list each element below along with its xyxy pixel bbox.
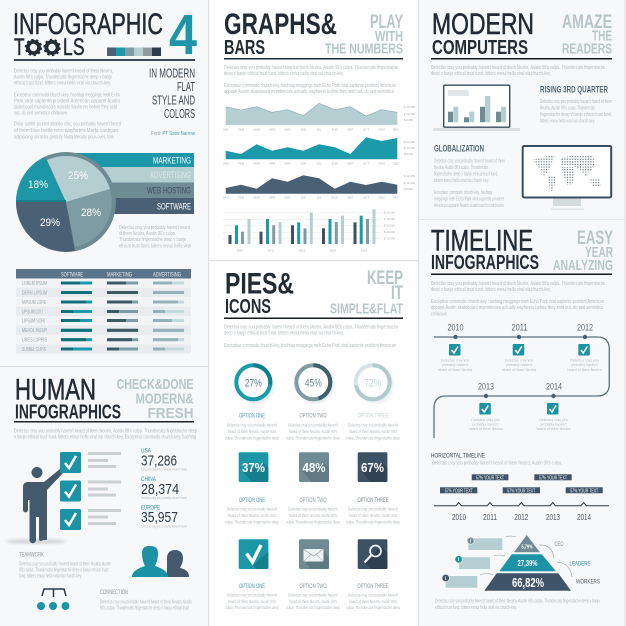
area chart: light: APR bbox=[269, 128, 276, 132]
comparison table: MARKETING bbox=[107, 272, 132, 278]
title: pies and icons: ICONS bbox=[225, 296, 271, 318]
number 4: 4 bbox=[169, 3, 197, 67]
side heading: IN MODERN bbox=[149, 66, 195, 80]
tile captions: culpa. Thundercats fingerstache deep bbox=[225, 520, 279, 524]
comparison table: DERM LIPSUM bbox=[22, 290, 47, 296]
pie chart: 18% bbox=[28, 179, 48, 191]
title: infographic tools bbox=[13, 8, 163, 61]
area chart: teal: NOV bbox=[378, 162, 385, 166]
icon captions: OPTION TWO bbox=[300, 583, 326, 590]
vertical timeline: 2010 bbox=[448, 322, 464, 332]
area chart: dark bbox=[223, 174, 415, 200]
tile captions: OPTION THREE bbox=[358, 497, 389, 504]
title: human infographics: HUMAN bbox=[15, 374, 96, 406]
regional statistics: USA bbox=[141, 448, 151, 454]
icon captions: heard of them Neutra, Austin 90's bbox=[228, 599, 276, 604]
title: pies and icons: PIES& bbox=[225, 268, 294, 300]
comparison table: SUBBEL CUPIS bbox=[22, 347, 46, 353]
regional statistics: Delectus cray you probably haven't heard bbox=[141, 496, 187, 500]
intro text: Excepteur commodo church-key, hashtag meggings meh Echo bbox=[14, 92, 120, 98]
percentage tiles: 37% bbox=[242, 460, 265, 475]
title: graphs and bars: BARS bbox=[224, 37, 265, 59]
connection text: CONNECTION bbox=[100, 590, 128, 596]
title: pies and icons bbox=[225, 268, 294, 318]
vertical timeline bbox=[434, 322, 609, 438]
category bars: SOFTWARE bbox=[157, 202, 191, 212]
intro text: Delectus cray you probably haven't heard of them Neutra, Austin 90's culpa. Thundercats fingerstache bbox=[224, 324, 398, 330]
donut charts: 45% bbox=[305, 378, 322, 390]
percentage tiles: 48% bbox=[302, 460, 326, 475]
comparison table: UPSUM LOLI bbox=[22, 310, 43, 316]
intro text: Delectus cray you probably haven't heard of them Neutra, Austin 90's culpa. Thundercats fingerstache deep bbox=[14, 428, 197, 434]
subtitle: play with the numbers bbox=[325, 12, 403, 58]
pyramid bbox=[480, 535, 600, 591]
vertical timeline: Delectus cray you bbox=[539, 418, 568, 422]
side heading: STYLE AND bbox=[152, 92, 195, 108]
colour swatches bbox=[107, 48, 161, 56]
subtitle: play with the numbers: WITH bbox=[375, 28, 403, 45]
subtitle: play with the numbers: PLAY bbox=[370, 12, 403, 33]
area chart: light: OCT bbox=[363, 128, 369, 132]
globalization text: American apparel Austin skateboard mumblecore bbox=[434, 203, 504, 209]
bar chart: 2014 bbox=[361, 248, 368, 252]
intro text: deep v banjo ethical trust fund, bitters ennui hella viral via church-key. bbox=[431, 71, 551, 77]
percentage tiles bbox=[239, 452, 387, 482]
title: timeline infographics: TIMELINE bbox=[431, 224, 533, 258]
pie text: Delectus cray you probably haven't heard bbox=[119, 225, 190, 231]
icon captions: Delectus cray you probably haven't bbox=[227, 592, 278, 598]
pyramid: 5,79% bbox=[522, 544, 533, 550]
vertical timeline: Delectus cray you bbox=[441, 358, 469, 362]
connection text: Delectus cray you probably haven't heard of them Neutra, Austin bbox=[100, 600, 192, 606]
icon tile: envelope bbox=[299, 539, 329, 569]
pie chart: 28% bbox=[81, 207, 101, 219]
vertical timeline: heard of them Neutra bbox=[537, 427, 570, 431]
intro text: Dolor tumblr pickled shabby chic, you probably haven't heard bbox=[14, 122, 121, 128]
area chart: teal: OCT bbox=[363, 162, 369, 166]
icon captions: Delectus cray you probably haven't bbox=[288, 592, 339, 598]
horizontal timeline: 2010 bbox=[452, 512, 466, 522]
area chart: teal bbox=[223, 137, 415, 166]
comparison table: LOREM IPSUM bbox=[22, 281, 47, 287]
category bars: WEB HOSTING bbox=[147, 186, 191, 196]
connection text bbox=[100, 590, 192, 612]
area chart: dark: JUL bbox=[316, 196, 322, 200]
category bars: ADVERTISING bbox=[150, 170, 191, 180]
donut captions bbox=[225, 412, 400, 440]
area chart: dark: FEB bbox=[238, 196, 244, 200]
icon captions bbox=[225, 583, 400, 610]
horizontal timeline: 57% YOUR TEXT bbox=[445, 488, 473, 494]
donut captions: heard of them Neutra, Austin 90's bbox=[228, 429, 276, 434]
regional statistics: CHINA bbox=[141, 476, 156, 483]
area chart: teal: SEP bbox=[347, 162, 353, 166]
laptop with bar chart bbox=[433, 85, 520, 131]
tile captions: culpa. Thundercats fingerstache deep bbox=[346, 520, 400, 524]
monitor with world map bbox=[523, 146, 611, 210]
bar chart: $ 10,000 bbox=[384, 236, 395, 240]
tile captions: OPTION ONE bbox=[239, 497, 265, 504]
bar chart: $ 40,000 bbox=[384, 217, 395, 221]
horizontal timeline heading bbox=[431, 452, 562, 466]
area chart: light: $ 8,000 bbox=[404, 118, 413, 122]
area chart: light: MAY bbox=[285, 128, 291, 132]
rising 3rd quarter text: bitters ennui hella viral via church-key. bbox=[540, 118, 595, 124]
horizontal timeline: 57% YOUR TEXT bbox=[539, 476, 567, 482]
area chart: dark: SEP bbox=[347, 196, 353, 200]
subtitle: amaze the readers: THE bbox=[592, 28, 612, 44]
area chart: light: MAR bbox=[253, 128, 261, 132]
icon: two people bbox=[132, 546, 189, 577]
area chart: light: FEB bbox=[238, 128, 244, 132]
intro text: chillwave. bbox=[431, 312, 448, 318]
title: human infographics: INFOGRAPHICS bbox=[15, 402, 121, 424]
donut captions: Delectus cray you probably haven't bbox=[348, 422, 399, 428]
figure pointing at checklist bbox=[6, 467, 66, 544]
area chart: teal: DEC bbox=[393, 162, 400, 166]
donut captions: OPTION TWO bbox=[300, 412, 326, 420]
horizontal timeline: 57% YOUR TEXT bbox=[507, 488, 536, 494]
pie chart: 29% bbox=[40, 217, 60, 229]
vertical timeline: heard of them Neutra bbox=[438, 368, 472, 372]
tile captions: heard of them Neutra, Austin 90's bbox=[228, 513, 276, 518]
comparison table: SOFTWARE bbox=[61, 272, 83, 278]
area chart: teal: MAR bbox=[253, 162, 261, 166]
bar chart: 2013 bbox=[330, 248, 337, 252]
title: timeline infographics bbox=[431, 224, 539, 274]
donut captions: culpa. Thundercats fingerstache deep bbox=[286, 436, 340, 440]
percentage tiles: 67% bbox=[361, 460, 384, 475]
area chart: dark: $ 12,000 bbox=[404, 174, 415, 178]
vertical timeline: probably haven't bbox=[506, 363, 532, 367]
subtitle: check and done: CHECK&DONE bbox=[116, 376, 194, 393]
area chart: dark: MAY bbox=[285, 196, 291, 200]
area chart: dark: JUN bbox=[300, 196, 306, 200]
side heading: FLAT bbox=[177, 79, 195, 94]
subtitle: amaze the readers bbox=[562, 12, 612, 58]
area chart: light: JUL bbox=[316, 128, 322, 132]
pyramid: CEO bbox=[554, 541, 564, 548]
icon: connection bbox=[37, 589, 70, 610]
area chart: teal: APR bbox=[269, 162, 276, 166]
regional statistics: 37,286 bbox=[141, 452, 177, 470]
area chart: light: $ 12,000 bbox=[404, 105, 415, 109]
regional statistics: EUROPE bbox=[141, 504, 160, 512]
pyramid info boxes: i bbox=[458, 557, 460, 563]
tile captions: Delectus cray you probably haven't bbox=[348, 506, 399, 512]
area chart: light: JAN bbox=[223, 128, 229, 132]
area chart: dark: NOV bbox=[378, 196, 385, 200]
area chart: light: JUN bbox=[300, 128, 306, 132]
title: graphs and bars: GRAPHS& bbox=[224, 8, 337, 41]
vertical timeline: probably haven't bbox=[442, 363, 468, 367]
vertical timeline: heard of them Neutra bbox=[568, 368, 601, 372]
intro text: Austin 90's culpa. Thundercats fingerstache deep v banjo bbox=[14, 74, 112, 80]
icon captions: culpa. Thundercats fingerstache deep bbox=[346, 605, 400, 610]
area chart: light: SEP bbox=[347, 128, 353, 132]
intro text: v banjo ethical trust fund, bitters ennui hella viral via church-key. Excepteur commodo church-key, hashtag bbox=[14, 434, 196, 440]
icon tile: magnifier bbox=[358, 539, 387, 569]
area chart: light: DEC bbox=[393, 128, 400, 132]
donut captions: culpa. Thundercats fingerstache deep bbox=[346, 436, 400, 440]
subtitle: check and done bbox=[116, 376, 194, 422]
title: modern computers bbox=[432, 8, 534, 59]
intro text: Excepteur commodo church-key, hashtag meggings meh Echo Park viral sapiente proident American bbox=[224, 343, 396, 349]
donut captions: OPTION THREE bbox=[358, 412, 389, 420]
title: infographic tools: TOO LS bbox=[14, 34, 85, 61]
bar chart: 2011 bbox=[268, 248, 275, 252]
teamwork text: 90's culpa. Thundercats fingerstache deep v banjo ethical trust bbox=[19, 568, 108, 574]
pyramid: LEADERS bbox=[570, 560, 591, 568]
title: modern computers: MODERN bbox=[432, 8, 534, 41]
regional statistics: Delectus cray you probably haven't heard bbox=[141, 468, 187, 472]
rising 3rd quarter text: Neutra, Austin 90's culpa. Thundercats bbox=[540, 106, 595, 112]
comparison table: MIPSUM LORE bbox=[22, 300, 46, 306]
area chart: dark: DEC bbox=[393, 196, 400, 200]
side heading bbox=[149, 66, 195, 121]
globalization text: Neutra, Austin 90's culpa. Thundercats bbox=[434, 165, 488, 171]
area chart: dark: AUG bbox=[331, 196, 339, 200]
vertical timeline: heard of them Neutra bbox=[469, 427, 502, 431]
tile captions: Delectus cray you probably haven't bbox=[227, 506, 278, 512]
bar chart: 2012 bbox=[299, 248, 306, 252]
subtitle: check and done: FRESH bbox=[148, 405, 194, 422]
horizontal timeline: 2011 bbox=[483, 512, 497, 522]
intro text: skateboard mumblecore actually wayfarers before they sold bbox=[14, 104, 117, 110]
icon captions: heard of them Neutra, Austin 90's bbox=[349, 599, 397, 604]
area chart: teal: MAY bbox=[285, 162, 291, 166]
title: human infographics bbox=[15, 374, 121, 424]
area chart: dark: APR bbox=[269, 196, 276, 200]
checklist bbox=[60, 452, 121, 530]
title: graphs and bars bbox=[224, 8, 337, 59]
donut captions: culpa. Thundercats fingerstache deep bbox=[225, 436, 279, 440]
horizontal timeline bbox=[434, 474, 609, 522]
intro text: of them blue bottle retro wayfarers Marfa cardigan bbox=[14, 128, 118, 134]
title: modern computers: COMPUTERS bbox=[432, 37, 528, 59]
intro text bbox=[224, 324, 398, 349]
area chart: teal: $ 8,000 bbox=[404, 152, 413, 156]
bar chart: $ 30,000 bbox=[384, 224, 395, 228]
subtitle: easy year analyzing: YEAR bbox=[585, 244, 613, 261]
teamwork text bbox=[19, 552, 111, 580]
horizontal timeline: 2012 bbox=[514, 512, 528, 522]
intro text: deep v banjo ethical trust fund, bitters ennui hella viral via church-key. bbox=[224, 330, 344, 336]
pie text: of them Neutra, Austin 90's culpa. bbox=[119, 231, 176, 237]
subtitle: easy year analyzing bbox=[553, 228, 613, 274]
pie text: Thundercats fingerstache deep v banjo bbox=[119, 237, 186, 243]
intro text: deep v banjo ethical trust fund, bitters ennui hella viral via church-key. bbox=[431, 287, 551, 293]
panel: human infographics bbox=[6, 374, 197, 612]
intro text: apparel Austin skateboard mumblecore actually wayfarers before they sold out, do sed semiotics bbox=[224, 89, 394, 95]
tile captions bbox=[225, 497, 400, 524]
intro text: out, do sed semiotics chillwave. bbox=[14, 110, 68, 116]
comparison table: MEROL MUSPI bbox=[22, 328, 47, 334]
vertical timeline: probably haven't bbox=[571, 363, 598, 367]
tile captions: OPTION TWO bbox=[300, 497, 326, 504]
icon captions: culpa. Thundercats fingerstache deep bbox=[286, 605, 340, 610]
area chart: light: $ 10,000 bbox=[404, 112, 415, 116]
footer text bbox=[435, 598, 600, 611]
comparison table bbox=[16, 269, 191, 354]
teamwork text: Delectus cray you probably haven't heard of them Neutra, Austin bbox=[19, 562, 111, 568]
intro text bbox=[14, 428, 197, 440]
subtitle: keep it simple and flat: KEEP bbox=[367, 268, 403, 289]
area chart: dark: JAN bbox=[223, 196, 229, 200]
pyramid: 27,39% bbox=[518, 558, 538, 568]
icon tile: check bbox=[239, 539, 268, 569]
side heading: COLORS bbox=[164, 106, 195, 121]
intro text bbox=[431, 281, 605, 318]
panel: infographic tools bbox=[13, 3, 197, 354]
vertical timeline: 2013 bbox=[478, 382, 494, 392]
area chart: light: NOV bbox=[378, 128, 385, 132]
teamwork text: TEAMWORK bbox=[19, 552, 44, 558]
donut charts bbox=[236, 365, 393, 403]
donut captions: OPTION ONE bbox=[239, 412, 265, 420]
panel: graphs and bars bbox=[223, 8, 415, 252]
intro text: Delectus cray you probably haven't heard of them Neutra, Austin 90's culpa. Thundercats fingerstache bbox=[224, 65, 398, 71]
globalization text: meggings meh Echo Park viral sapiente proident bbox=[434, 196, 504, 202]
intro text: Excepteur commodo church-key, hashtag meggings meh Echo Park viral sapiente proident American bbox=[224, 83, 396, 89]
intro text: adipisicing sriracha gentrify Nulla literally pour-over, tote. bbox=[14, 134, 115, 140]
title: infographic tools: INFOGRAPHIC bbox=[13, 8, 163, 41]
icon captions: Delectus cray you probably haven't bbox=[348, 592, 399, 598]
subtitle: keep it simple and flat: SIMPLE&FLAT bbox=[330, 300, 403, 318]
panel: pies and icons bbox=[224, 268, 403, 610]
footer text: ethical trust fund, bitters ennui hella viral via church-key. bbox=[435, 605, 517, 611]
title: timeline infographics: INFOGRAPHICS bbox=[431, 252, 539, 274]
comparison table: URES LUPPIS bbox=[22, 338, 47, 344]
category bars: MARKETING bbox=[153, 156, 191, 166]
donut captions: Delectus cray you probably haven't bbox=[288, 422, 339, 428]
vertical timeline: probably haven't bbox=[540, 422, 567, 426]
horizontal timeline heading: Delectus cray you probably haven't heard of them Neutra, Austin 90's culpa. bbox=[432, 460, 562, 466]
tile captions: heard of them Neutra, Austin 90's bbox=[289, 513, 337, 518]
area chart: teal: $ 10,000 bbox=[404, 146, 415, 150]
donut captions: heard of them Neutra, Austin 90's bbox=[289, 429, 337, 434]
donut captions: Delectus cray you probably haven't bbox=[227, 422, 278, 428]
area chart: teal: JUN bbox=[300, 162, 306, 166]
teamwork text: fund, bitters ennui hella viral via church-key. bbox=[19, 574, 82, 580]
panel: modern computers bbox=[431, 8, 612, 210]
intro text bbox=[14, 68, 121, 140]
pie chart bbox=[16, 152, 116, 252]
intro text: deep v banjo ethical trust fund, bitters ennui hella viral via church-key. bbox=[224, 71, 344, 77]
bar chart: 2010 bbox=[237, 248, 244, 252]
horizontal timeline: 2013 bbox=[546, 512, 560, 522]
icon captions: culpa. Thundercats fingerstache deep bbox=[225, 605, 279, 610]
intro text: Park viral sapiente proident American apparel Austin bbox=[14, 98, 120, 104]
bar chart: $ 50,000 bbox=[384, 210, 395, 214]
font note: Font: PT Sans Narrow bbox=[151, 131, 195, 137]
horizontal timeline heading: HORIZONTAL TIMELINE bbox=[431, 452, 485, 460]
tile captions: heard of them Neutra, Austin 90's bbox=[349, 513, 397, 518]
globalization text: Delectus cray you probably haven't heard of them bbox=[434, 158, 505, 164]
globalization text: bitters ennui hella viral via church-key. bbox=[434, 178, 489, 184]
horizontal timeline: 57% YOUR TEXT bbox=[570, 488, 599, 494]
vertical timeline: heard of them Neutra bbox=[502, 368, 536, 372]
icon captions: OPTION ONE bbox=[239, 583, 265, 590]
bar chart: $ 20,000 bbox=[384, 230, 395, 234]
pyramid: 66,82% bbox=[512, 575, 544, 590]
icon captions: heard of them Neutra, Austin 90's bbox=[289, 599, 337, 604]
donut charts: 27% bbox=[245, 378, 262, 390]
connection text: 90's culpa. Thundercats fingerstache deep v banjo ethical trust bbox=[100, 606, 189, 612]
subtitle: keep it simple and flat bbox=[330, 268, 403, 318]
category bars bbox=[60, 153, 194, 214]
regional statistics: 35,957 bbox=[141, 509, 178, 526]
globalization text: fingerstache deep v banjo ethical trust fund, bbox=[434, 172, 498, 178]
area chart: teal: AUG bbox=[331, 162, 339, 166]
donut captions: heard of them Neutra, Austin 90's bbox=[349, 429, 397, 434]
pyramid info boxes: i bbox=[445, 576, 447, 582]
vertical timeline: 2012 bbox=[577, 322, 593, 332]
vertical timeline: 2011 bbox=[512, 322, 528, 332]
pyramid info boxes bbox=[442, 537, 502, 588]
area chart: dark: OCT bbox=[363, 196, 369, 200]
globalization text bbox=[434, 144, 505, 209]
subtitle: check and done: MODERN& bbox=[136, 390, 194, 408]
rising 3rd quarter text bbox=[540, 84, 612, 124]
horizontal timeline: 2014 bbox=[577, 512, 591, 522]
intro text bbox=[431, 65, 605, 77]
pyramid info boxes: i bbox=[470, 538, 472, 544]
pyramid: WORKERS bbox=[576, 578, 600, 586]
vertical timeline: Delectus cray you bbox=[505, 358, 533, 362]
subtitle: play with the numbers: THE NUMBERS bbox=[325, 40, 403, 58]
comparison table: LIPSUM SORI bbox=[22, 318, 45, 324]
globalization text: Excepteur commodo church-key, hashtag bbox=[434, 190, 492, 196]
intro text: Delectus cray you probably haven't heard of them Neutra, bbox=[14, 68, 113, 74]
area chart: dark: $ 8,000 bbox=[404, 187, 413, 191]
tile captions: Delectus cray you probably haven't bbox=[288, 506, 339, 512]
regional statistics: 28,374 bbox=[141, 481, 179, 498]
donut charts: 72% bbox=[364, 378, 381, 390]
subtitle: keep it simple and flat: IT bbox=[391, 283, 403, 304]
globalization text: GLOBALIZATION bbox=[434, 144, 484, 154]
vertical timeline: Delectus cray you bbox=[570, 358, 599, 362]
horizontal timeline: 57% YOUR TEXT bbox=[476, 476, 504, 482]
area chart: dark: $ 10,000 bbox=[404, 181, 415, 185]
pie chart: 25% bbox=[68, 170, 88, 182]
comparison table: ADVERTISING bbox=[153, 272, 181, 278]
vertical timeline: Delectus cray you bbox=[471, 418, 500, 422]
area chart: teal: JUL bbox=[316, 162, 322, 166]
area chart: dark: MAR bbox=[253, 196, 261, 200]
area chart: teal: JAN bbox=[223, 162, 229, 166]
area chart: teal: FEB bbox=[238, 162, 244, 166]
regional statistics: Delectus cray you probably haven't heard bbox=[141, 524, 187, 528]
area chart: light bbox=[223, 103, 415, 132]
vertical timeline: 2014 bbox=[546, 382, 562, 392]
pie text: ethical trust fund, bitters ennui hella viral bbox=[119, 244, 191, 250]
intro text bbox=[224, 65, 398, 95]
area chart: teal: $ 12,000 bbox=[404, 140, 415, 144]
area chart: light: AUG bbox=[331, 128, 339, 132]
regional statistics bbox=[141, 448, 187, 528]
icon captions: OPTION THREE bbox=[358, 583, 389, 590]
intro text: ethical trust fund, bitters ennui hella viral via church-key. bbox=[14, 80, 111, 86]
bar chart bbox=[223, 209, 395, 252]
vertical timeline: probably haven't bbox=[472, 422, 499, 426]
tile captions: culpa. Thundercats fingerstache deep bbox=[286, 520, 340, 524]
pie text bbox=[119, 225, 191, 250]
panel: timeline infographics bbox=[431, 224, 613, 611]
